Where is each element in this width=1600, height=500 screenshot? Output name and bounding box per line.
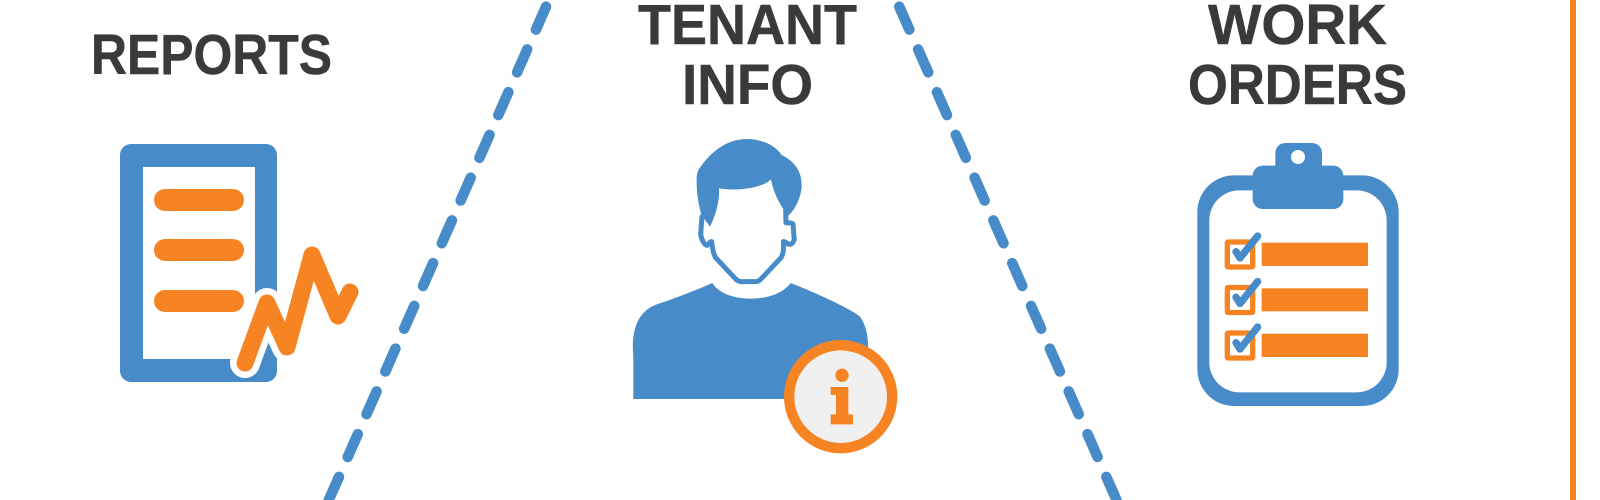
icon: report document with chart line	[120, 144, 350, 382]
face outline	[701, 210, 794, 282]
heading: work orders: ORDERS	[1188, 53, 1407, 117]
info badge	[789, 345, 892, 448]
body	[633, 283, 868, 399]
chart line	[245, 255, 350, 363]
document frame	[120, 144, 277, 382]
heading: reports: REPORTS	[91, 23, 332, 87]
divider: orange vertical line	[1570, 0, 1576, 500]
checklist row 2	[1227, 281, 1368, 312]
icon: tenant person with info badge	[633, 139, 892, 448]
text line bars	[154, 189, 244, 312]
checklist row 3	[1227, 327, 1368, 358]
board	[1197, 175, 1399, 406]
icon: clipboard checklist	[1197, 143, 1399, 406]
checklist row 1	[1227, 236, 1368, 267]
divider: left dashed line	[320, 7, 546, 500]
chart line halo	[245, 255, 350, 363]
heading: work orders	[1188, 0, 1407, 117]
heading: tenant info	[638, 0, 857, 117]
clip	[1253, 143, 1343, 209]
divider: right dashed line	[899, 7, 1125, 500]
hair	[697, 139, 802, 227]
heading: tenant info: INFO	[682, 53, 813, 117]
info glyph	[831, 369, 853, 424]
